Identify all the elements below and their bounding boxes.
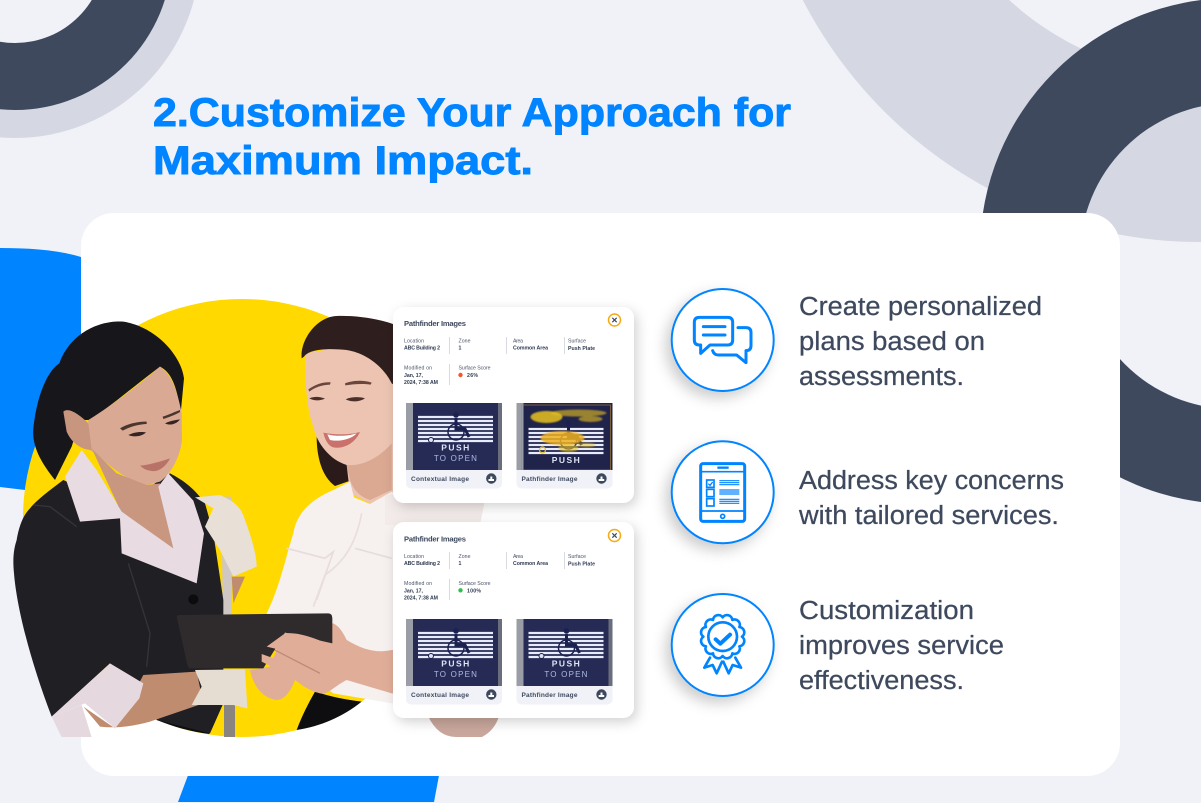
shape: left blue block: [0, 248, 81, 490]
contextual image tile: [406, 403, 502, 488]
card: pathfinder images 100 percent: [393, 522, 634, 718]
inspection details: Common Area: [513, 346, 548, 352]
yellow circle behind people: [23, 299, 461, 737]
card: pathfinder images 26 percent: [393, 307, 634, 503]
inspection details: Surface Score: [458, 366, 491, 372]
text: personalized plans: Create personalized: [799, 293, 1042, 321]
title: [153, 91, 791, 183]
inspection details: Surface: [568, 338, 586, 344]
card heading: Pathfinder Images: [404, 534, 466, 543]
pathfinder image tile clean: TO OPEN: [544, 670, 589, 679]
photo: two women looking at a tablet: [13, 316, 499, 738]
text: service effectiveness: Customization: [799, 597, 974, 625]
inspection details: Area: [513, 554, 523, 560]
inspection details: Modified on: [404, 581, 432, 587]
white content panel: [81, 213, 1120, 776]
inspection details: Modified on: [404, 366, 432, 372]
text: tailored services: [798, 467, 1064, 530]
inspection details: Zone: [458, 338, 471, 344]
pathfinder image tile clean: Pathfinder Image: [522, 692, 578, 699]
contextual image tile: PUSH: [441, 442, 471, 452]
text: personalized plans: plans based on: [799, 328, 985, 356]
text: personalized plans: assessments.: [799, 363, 964, 391]
contextual image tile: TO OPEN: [434, 454, 478, 463]
inspection details: Surface Score: [458, 581, 491, 587]
text: service effectiveness: improves service: [799, 632, 1004, 660]
text: tailored services: with tailored services.: [798, 502, 1059, 530]
title: 2.Customize Your Approach for: [153, 91, 791, 135]
text: service effectiveness: [799, 597, 1004, 695]
tablet fingers: [262, 633, 330, 680]
shape: top-left rings: [0, 0, 200, 138]
inspection details: Jan, 17,: [404, 373, 424, 379]
inspection details: Push Plate: [568, 562, 595, 568]
inspection details: Push Plate: [568, 346, 595, 352]
close icon: [608, 314, 620, 326]
inspection details: ABC Building 2: [404, 346, 440, 352]
title: Maximum Impact.: [153, 139, 533, 183]
inspection details: ABC Building 2: [404, 561, 440, 567]
inspection details: Common Area: [513, 561, 548, 567]
colleague sleeve and blouse behind cards: [385, 495, 484, 522]
contextual image tile: PUSH: [441, 658, 471, 668]
shape: top-right rings: [753, 0, 1201, 504]
inspection details: 100%: [467, 588, 481, 594]
inspection details: Zone: [458, 554, 471, 560]
colleague hand below cards: [429, 718, 498, 737]
inspection details: [404, 552, 595, 601]
pathfinder image tile with contamination overlay: [516, 403, 612, 488]
card heading: Pathfinder Images: [404, 319, 466, 328]
contextual image tile: TO OPEN: [434, 670, 478, 679]
text: tailored services: Address key concerns: [799, 467, 1064, 495]
icon: chat bubbles: [672, 289, 774, 391]
inspection details: 2024, 7:38 AM: [404, 595, 438, 601]
inspection details: 26%: [467, 373, 478, 379]
close icon: [608, 530, 620, 542]
shape: bottom blue bar: [178, 770, 440, 802]
tablet: [177, 613, 332, 668]
inspection details: 2024, 7:38 AM: [404, 380, 438, 386]
icon: tablet checklist: [672, 441, 774, 543]
person: housekeeper in black uniform: [13, 321, 257, 738]
pathfinder image tile clean: PUSH: [552, 658, 581, 668]
inspection details: Location: [404, 338, 424, 344]
inspection details: [404, 337, 595, 386]
text: personalized plans: [799, 293, 1042, 391]
inspection details: Surface: [568, 554, 586, 560]
pathfinder image tile with contamination overlay: Pathfinder Image: [522, 476, 578, 483]
contextual image tile: [406, 619, 502, 704]
inspection details: 1: [458, 346, 462, 352]
contextual image tile: Contextual Image: [411, 692, 469, 699]
inspection details: Location: [404, 554, 424, 560]
contextual image tile: Contextual Image: [411, 476, 469, 483]
icon: award badge: [672, 594, 774, 696]
person: colleague in white blouse: [250, 316, 396, 730]
pathfinder image tile clean: [516, 619, 612, 704]
inspection details: Jan, 17,: [404, 588, 424, 594]
text: service effectiveness: effectiveness.: [799, 667, 964, 695]
inspection details: Area: [513, 338, 523, 344]
pathfinder image tile with contamination overlay: PUSH: [552, 455, 581, 465]
inspection details: 1: [458, 561, 462, 567]
